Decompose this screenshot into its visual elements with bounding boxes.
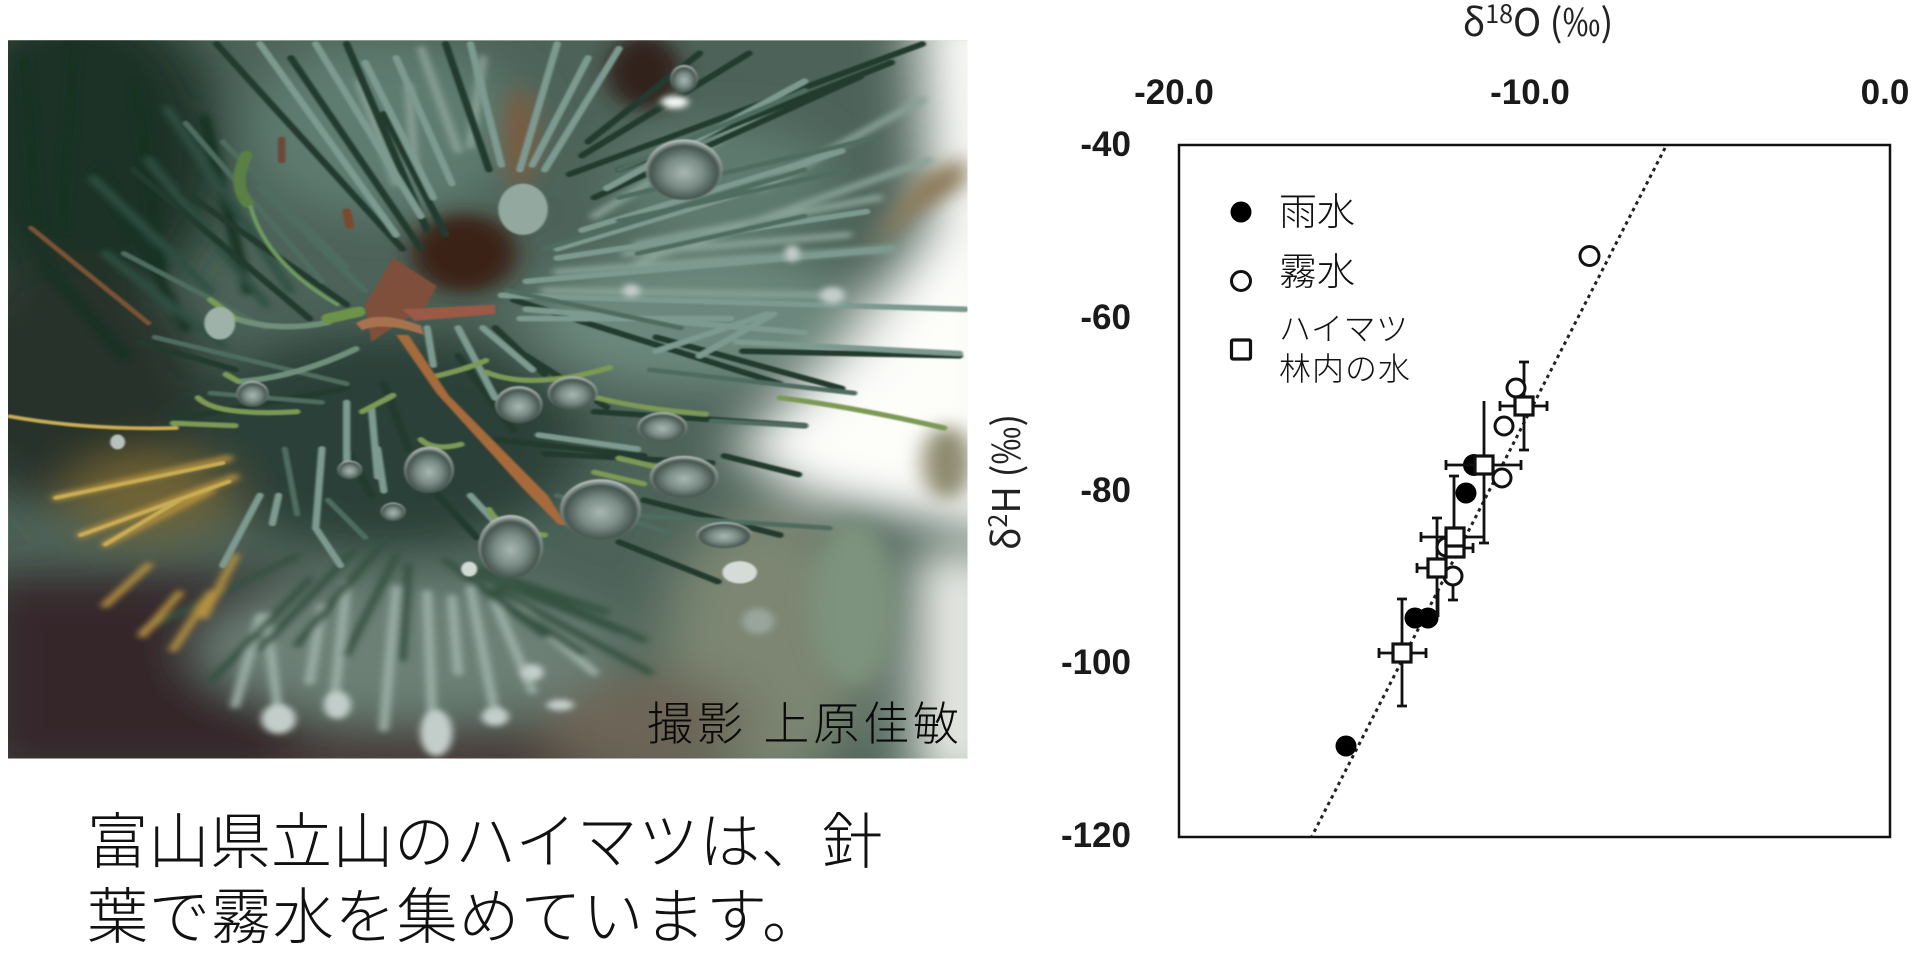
y-axis tick labels: -40 xyxy=(1080,125,1131,164)
brown twig and bud scales xyxy=(356,258,567,526)
scatter plot xyxy=(1179,145,1890,837)
photo credit: 撮影 上原佳敏 xyxy=(647,698,959,750)
regression line xyxy=(1312,148,1665,836)
blurred droplets xyxy=(261,96,845,756)
y-axis tick labels: -120 xyxy=(1061,816,1131,855)
plot frame xyxy=(1179,145,1890,837)
x-axis tick labels: 0.0 xyxy=(1861,73,1909,112)
y-axis tick labels xyxy=(1061,125,1131,855)
blurred background needles xyxy=(25,49,928,742)
legend xyxy=(1230,192,1410,387)
photo: dwarf pine needles with fog droplets xyxy=(8,40,968,758)
x-axis tick labels: -20.0 xyxy=(1134,73,1214,112)
sharp needles xyxy=(9,44,966,582)
legend: water inside pine forest xyxy=(1232,311,1410,387)
pine forest water points xyxy=(1393,397,1533,662)
x-axis tick labels xyxy=(1134,73,1909,112)
y-axis title: δ xyxy=(976,528,1031,550)
y-axis tick labels: -100 xyxy=(1061,643,1131,682)
y-axis tick labels: -80 xyxy=(1080,471,1131,510)
rain water points xyxy=(1336,454,1485,756)
legend: rain water: 雨水 xyxy=(1279,192,1355,234)
y-axis tick labels: -60 xyxy=(1080,298,1131,337)
legend: rain water xyxy=(1230,192,1355,234)
error bars xyxy=(1379,362,1547,706)
y-axis title: H (‰) xyxy=(976,414,1031,514)
water droplets xyxy=(110,65,757,583)
fog water points xyxy=(1437,246,1599,585)
caption line 2: 葉で霧水を集めています。 xyxy=(87,883,823,951)
legend: water inside pine forest: ハイマツ xyxy=(1279,311,1408,347)
legend: fog water xyxy=(1232,252,1355,294)
x-axis tick labels: -10.0 xyxy=(1490,73,1570,112)
legend: water inside pine forest: 林内の水 xyxy=(1279,351,1410,387)
legend: fog water: 霧水 xyxy=(1279,252,1355,294)
caption line 1: 富山県立山のハイマツは、針 xyxy=(87,808,883,876)
caption xyxy=(87,808,883,951)
y-axis title: 2 xyxy=(979,514,1015,528)
